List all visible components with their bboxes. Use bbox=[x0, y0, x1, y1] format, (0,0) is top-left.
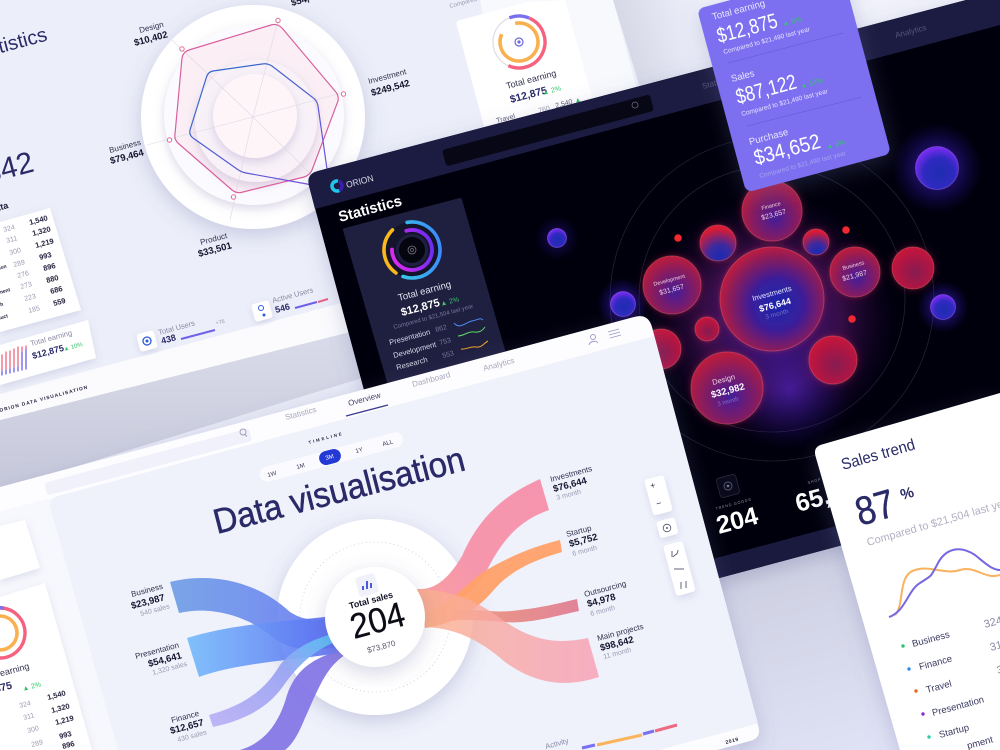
ring chart bbox=[484, 7, 554, 77]
dark statistics card: Compared to $21,504 last year bbox=[393, 304, 474, 331]
dark statistics card: Presentation bbox=[388, 327, 431, 347]
center total: 204 bbox=[346, 595, 409, 647]
sankey backdrop circles bbox=[277, 519, 473, 715]
purple summary card: Purchase bbox=[748, 127, 790, 148]
dark search bar bbox=[442, 94, 654, 166]
radar labels: Investment bbox=[367, 67, 408, 86]
timeline selector: ALL bbox=[382, 439, 394, 448]
dark header tabs: Statistics bbox=[701, 74, 734, 91]
bubble glows bbox=[535, 123, 982, 450]
total users stat: +76 bbox=[215, 319, 226, 327]
sidebar earning card: 1,320 bbox=[50, 701, 71, 715]
purple summary card: $34,652 bbox=[751, 130, 823, 170]
sidebar earning card: 1,219 bbox=[54, 713, 75, 727]
bubble labels: $21,987 bbox=[842, 270, 868, 283]
bubble labels: 3 month bbox=[765, 308, 790, 321]
radar labels: Product bbox=[199, 231, 229, 247]
dark statistics card: ▲ 2% bbox=[440, 296, 460, 308]
center total bbox=[325, 567, 425, 667]
bubble labels: Business bbox=[842, 260, 865, 272]
sankey labels: right: 11 month bbox=[603, 647, 632, 661]
panel shell bbox=[0, 316, 759, 750]
total earning card: ▲ 2% bbox=[542, 85, 562, 97]
radar labels: Design bbox=[138, 20, 165, 35]
purple summary card: $87,122 bbox=[733, 71, 799, 109]
data table card: 1,219 bbox=[34, 236, 55, 250]
zoom controls: + bbox=[649, 480, 657, 491]
dark statistics card: Development bbox=[392, 340, 438, 360]
purple summary card: Compared to $21,490 last year bbox=[723, 26, 812, 56]
legend list: Startup bbox=[938, 722, 970, 741]
tabs: Analytics bbox=[482, 356, 515, 373]
sankey labels: right bbox=[549, 464, 644, 661]
sidebar bbox=[0, 498, 118, 750]
sankey chart: outflows bbox=[417, 479, 599, 683]
dark statistics card: 862 bbox=[435, 324, 448, 334]
legend list: Finance bbox=[918, 654, 953, 673]
dark header band bbox=[308, 0, 1000, 209]
footer strip bbox=[0, 218, 680, 420]
data table card: 896 bbox=[42, 261, 57, 273]
bubbles bbox=[641, 181, 934, 424]
logo: Orion bbox=[330, 173, 375, 193]
right sidebar strip bbox=[480, 0, 680, 285]
sidebar earning card: 324 bbox=[19, 700, 32, 710]
sales trend card bbox=[815, 393, 1000, 750]
tabs: Overview bbox=[347, 391, 382, 408]
purple bubbles bbox=[548, 146, 958, 320]
total users stat: Total Users bbox=[157, 318, 196, 337]
sidebar earning card: 993 bbox=[58, 729, 73, 741]
data table card bbox=[0, 208, 81, 332]
sankey labels: right: Startup bbox=[565, 523, 593, 539]
purple summary card bbox=[697, 0, 891, 193]
bubble labels: Investments bbox=[751, 284, 793, 303]
data table card: 273 bbox=[20, 281, 33, 291]
data table card: 1,540 bbox=[28, 213, 49, 227]
trend goods stat: 204 bbox=[713, 502, 761, 540]
data table card: 223 bbox=[24, 293, 37, 303]
bubble labels: $31,657 bbox=[659, 284, 685, 297]
legend list bbox=[901, 615, 1000, 750]
bubble labels: $32,982 bbox=[710, 381, 746, 401]
bubble labels: Development bbox=[653, 274, 686, 288]
sidebar ring chart bbox=[0, 608, 25, 658]
bubble labels: Design bbox=[711, 372, 736, 387]
active users stat: 546 bbox=[274, 301, 291, 315]
sankey labels: left: $12,657 bbox=[169, 717, 205, 737]
data table card: 880 bbox=[45, 273, 60, 285]
icon: dark search bbox=[632, 102, 638, 108]
sankey chart: inflows bbox=[170, 578, 345, 750]
sankey labels: right: $4,978 bbox=[586, 592, 617, 610]
radar labels: $33,501 bbox=[197, 240, 234, 260]
radar labels: $10,402 bbox=[133, 29, 169, 49]
active users stat bbox=[251, 285, 328, 322]
shop stat: 65, bbox=[792, 482, 833, 518]
sankey labels: right: 6 month bbox=[590, 605, 616, 618]
sidebar earning card: 300 bbox=[27, 725, 40, 735]
shadow backdrop: between panels bbox=[0, 310, 420, 490]
sales trend card: % bbox=[898, 484, 916, 504]
activity bar bbox=[544, 725, 677, 750]
dark ring chart bbox=[373, 211, 451, 289]
shadow backdrop: lower right bbox=[700, 480, 1000, 750]
shadow backdrop: top right bbox=[613, 0, 1000, 120]
sankey labels: left: 430 sales bbox=[177, 729, 208, 744]
data table card: 324 bbox=[3, 224, 16, 234]
dark statistics card bbox=[345, 200, 503, 385]
sankey labels: left: Presentation bbox=[134, 641, 180, 661]
sankey labels: right: Investments bbox=[549, 464, 593, 484]
content area bbox=[50, 336, 758, 750]
total earning card: Travel bbox=[496, 113, 516, 125]
panel: light radar dashboard bbox=[0, 0, 680, 420]
total earning card: ▲ bbox=[574, 96, 582, 105]
timeline selector: 3M bbox=[325, 454, 335, 462]
data table card: 686 bbox=[49, 284, 64, 296]
purple summary card: ▲ 8% bbox=[782, 16, 802, 28]
sankey labels: left: 540 sales bbox=[140, 603, 171, 618]
sales trend card: 87 bbox=[850, 482, 900, 535]
sankey labels: left: Business bbox=[130, 582, 164, 599]
line chart bbox=[889, 549, 1000, 617]
radar labels: Business bbox=[108, 138, 142, 155]
timeline selector: 1M bbox=[296, 463, 306, 471]
legend list: Travel bbox=[925, 679, 953, 696]
total earning card bbox=[456, 0, 592, 130]
zoom controls bbox=[644, 475, 696, 596]
center total: Total sales bbox=[348, 590, 394, 611]
tabs bbox=[284, 356, 515, 422]
sankey labels: left: $23,987 bbox=[130, 592, 166, 612]
panel: dark Orion dashboard bbox=[308, 0, 1000, 654]
timeline selector bbox=[258, 431, 405, 483]
search bar bbox=[44, 428, 252, 496]
total earning card: Total earning bbox=[505, 68, 557, 91]
orbit rings bbox=[610, 137, 934, 461]
purple summary card: Sales bbox=[730, 68, 756, 85]
tabs: Statistics bbox=[284, 405, 317, 422]
sankey labels: right: Outsourcing bbox=[583, 579, 627, 599]
data table card: 276 bbox=[17, 270, 30, 280]
footer label: ORION DATA VISUALISATION bbox=[0, 384, 89, 414]
dark statistics card: Total earning bbox=[397, 279, 452, 304]
sidebar earning card: 1,540 bbox=[46, 688, 67, 702]
sidebar earning card: ▲ 2% bbox=[22, 681, 42, 693]
purple summary card: ▲ 9% bbox=[826, 139, 846, 151]
sankey labels: right: Main projects bbox=[596, 622, 644, 643]
purple summary card: Compared to $21,490 last year bbox=[741, 88, 830, 118]
timeline selector: 1Y bbox=[355, 447, 364, 455]
bubble labels bbox=[653, 201, 868, 408]
sankey labels: left bbox=[130, 582, 208, 744]
sales trend card: Sales trend bbox=[839, 437, 917, 474]
dark header tabs bbox=[701, 23, 927, 91]
timeline selector: 1W bbox=[267, 471, 278, 479]
icon: sliders bbox=[608, 329, 621, 338]
total users stat: 438 bbox=[160, 332, 177, 346]
data table card: 993 bbox=[38, 250, 53, 262]
sidebar earning card bbox=[0, 583, 92, 750]
trend goods stat bbox=[713, 474, 761, 540]
sankey labels: left: 1,320 sales bbox=[152, 661, 189, 677]
total earning card: $12,875 bbox=[509, 84, 549, 106]
panel: data visualisation dashboard bbox=[0, 316, 759, 750]
active users stat: Active Users bbox=[271, 285, 314, 305]
logo: Orion: ORION bbox=[345, 173, 375, 190]
legend list: Presentation bbox=[931, 694, 985, 719]
sparklines bbox=[454, 319, 488, 349]
year label: 2019 bbox=[725, 737, 740, 746]
dark header tabs: Analytics bbox=[894, 23, 927, 40]
earning mini card: $12,875 bbox=[31, 343, 65, 361]
heading: dark Statistics: Statistics bbox=[337, 193, 404, 226]
bubble labels: Finance bbox=[761, 201, 781, 212]
sidebar earning card: 289 bbox=[31, 739, 44, 749]
earning mini card bbox=[0, 320, 96, 385]
trend goods stat: TREND GOODS bbox=[715, 498, 752, 511]
red dots bbox=[660, 226, 856, 401]
dark statistics card: Research bbox=[395, 355, 429, 372]
shop stat: SHOP bbox=[807, 477, 822, 485]
data table card: 559 bbox=[52, 296, 67, 308]
legend list: Business bbox=[911, 629, 951, 650]
tabs: Dashboard bbox=[411, 370, 451, 389]
dark statistics card: $12,875 bbox=[400, 297, 441, 319]
center total: $73,870 bbox=[366, 639, 397, 655]
radar labels bbox=[108, 0, 411, 260]
purple summary card: ▲ 12% bbox=[800, 77, 824, 90]
data table card: 289 bbox=[13, 259, 26, 269]
earning mini card: Total earning bbox=[29, 328, 73, 348]
icon: user bbox=[589, 334, 598, 345]
sidebar earning card: 311 bbox=[23, 712, 35, 722]
dark footer band bbox=[430, 482, 1000, 654]
earning mini card: ▲ 10% bbox=[63, 342, 84, 353]
sankey labels: right: $98,642 bbox=[599, 634, 635, 654]
sidebar summary card bbox=[0, 520, 40, 580]
radar labels: $249,542 bbox=[370, 78, 411, 99]
sankey labels: right: $5,752 bbox=[568, 532, 599, 550]
data table card: 185 bbox=[28, 305, 41, 315]
sankey labels: left: Finance bbox=[170, 709, 201, 725]
bubble labels: $23,657 bbox=[761, 209, 787, 222]
sankey labels: right: 3 month bbox=[556, 489, 582, 502]
bubble labels: 3 month bbox=[717, 397, 739, 408]
purple summary card: Compared to $21,490 last year bbox=[759, 150, 848, 180]
icon: search bbox=[240, 429, 247, 436]
timeline selector: TIMELINE bbox=[308, 431, 344, 445]
zoom controls: − bbox=[655, 498, 663, 509]
data table card: 300 bbox=[9, 247, 22, 257]
data table card: 1,320 bbox=[31, 224, 52, 238]
radar chart bbox=[141, 5, 365, 229]
total earning card: 760 bbox=[538, 105, 551, 115]
total earning card: 2,540 bbox=[555, 99, 574, 110]
sankey labels: right: $76,644 bbox=[552, 475, 589, 495]
data table card: 311 bbox=[6, 235, 18, 245]
title: Data visualisation bbox=[209, 440, 469, 542]
sankey labels: left: $54,641 bbox=[147, 650, 184, 670]
bubble labels: $76,644 bbox=[758, 296, 792, 314]
bubble chart bbox=[535, 123, 982, 461]
total users stat bbox=[136, 318, 226, 352]
sankey labels: right: 6 month bbox=[572, 545, 598, 558]
bar chart bbox=[2, 346, 26, 375]
dark statistics card: 753 bbox=[439, 337, 452, 347]
dark statistics card: 553 bbox=[442, 350, 455, 360]
radar labels: $79,464 bbox=[109, 147, 146, 167]
purple summary card: $12,875 bbox=[714, 10, 780, 48]
